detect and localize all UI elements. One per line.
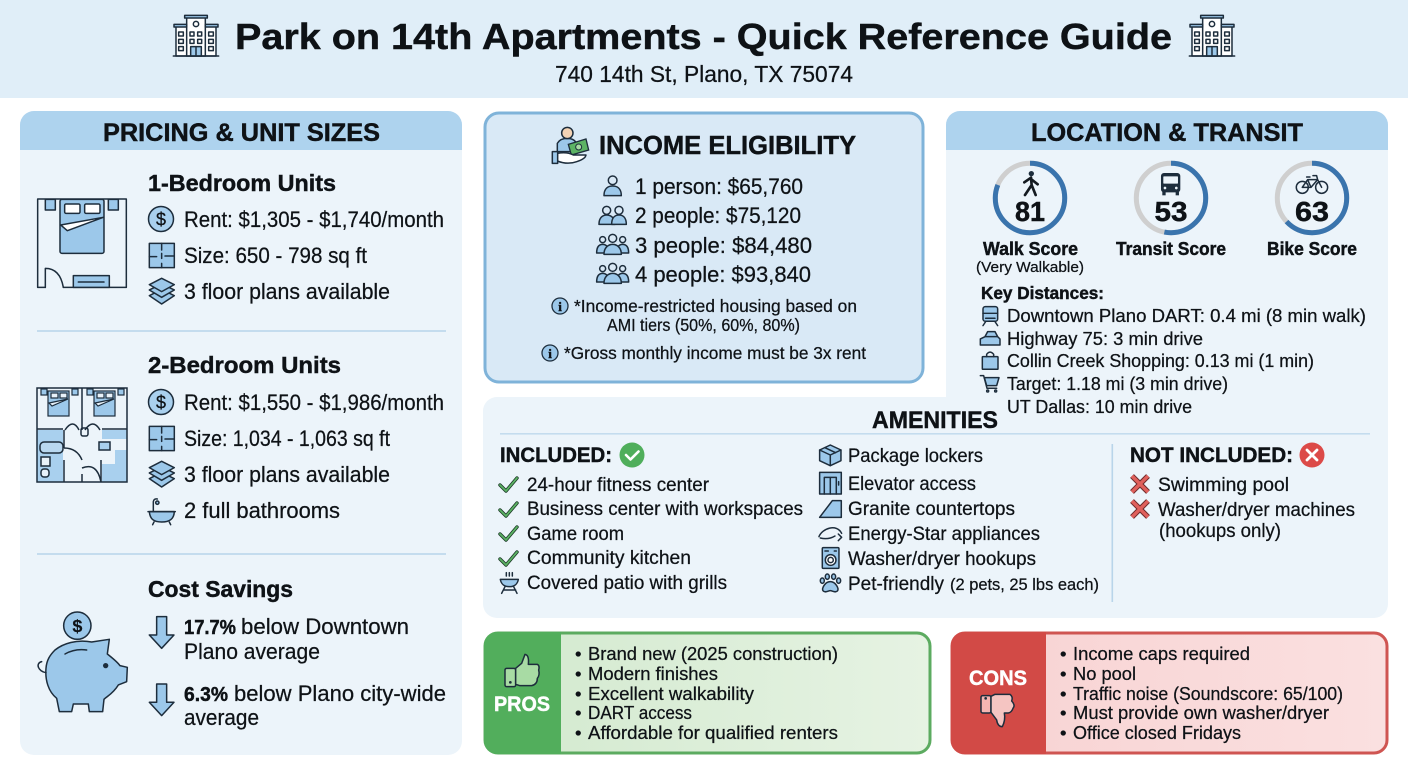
icon: two people bbox=[599, 206, 626, 224]
floor plans 1-bedroom: 3 floor plans available bbox=[184, 279, 390, 304]
income 2 people: 2 people: $75,120 bbox=[635, 203, 801, 228]
icon: dollar: $ bbox=[156, 210, 166, 230]
game room: Game room bbox=[527, 523, 624, 545]
note: income restricted: *Income-restricted housing based on bbox=[574, 296, 857, 316]
included heading: INCLUDED: bbox=[500, 444, 612, 467]
icon: floor plan bbox=[149, 426, 174, 451]
heading: location: LOCATION & TRANSIT bbox=[1031, 119, 1303, 147]
pros list bbox=[575, 643, 838, 743]
pros list: Excellent walkability bbox=[588, 683, 755, 704]
washer dryer machines: Washer/dryer machines bbox=[1158, 499, 1355, 521]
icon: dollar bbox=[148, 390, 174, 414]
business center: Business center with workspaces bbox=[527, 498, 803, 520]
icon: bathtub bbox=[148, 499, 175, 525]
not included list bbox=[1132, 474, 1355, 542]
icon: down arrow bbox=[149, 617, 174, 648]
icon: money in hand bbox=[552, 127, 589, 163]
icon: red x circle bbox=[1300, 442, 1324, 468]
granite countertops: Granite countertops bbox=[848, 498, 1015, 520]
icon: info: i bbox=[548, 346, 552, 361]
pros list: DART access bbox=[588, 702, 692, 723]
note: income restricted: AMI tiers (50%, 60%, 80%) bbox=[607, 315, 800, 335]
cons list bbox=[1060, 643, 1343, 743]
fitness center: 24-hour fitness center bbox=[527, 474, 709, 496]
icon: energy star bbox=[819, 528, 842, 541]
distance: UT Dallas: UT Dallas: 10 min drive bbox=[1007, 396, 1192, 417]
icon: two bedroom floor plan bbox=[37, 388, 127, 482]
icon: thumbs up bbox=[505, 654, 539, 687]
pet friendly: Pet-friendly bbox=[848, 573, 944, 595]
cost savings heading: Cost Savings bbox=[148, 576, 293, 602]
hookups only: (hookups only) bbox=[1159, 520, 1281, 542]
icon: piggy bank: $ bbox=[72, 616, 82, 636]
distance: Target: Target: 1.18 mi (3 min drive) bbox=[1007, 373, 1228, 394]
cons label: CONS bbox=[969, 667, 1027, 690]
heading: pricing: PRICING & UNIT SIZES bbox=[103, 119, 380, 147]
note: income restricted bbox=[574, 296, 857, 335]
bike score bbox=[1267, 163, 1357, 259]
pros list: Affordable for qualified renters bbox=[588, 722, 838, 743]
swimming pool: Swimming pool bbox=[1158, 474, 1289, 496]
icon: thumbs down bbox=[981, 694, 1014, 727]
header banner bbox=[0, 0, 1408, 98]
heading: amenities: AMENITIES bbox=[872, 407, 998, 434]
cons list: Office closed Fridays bbox=[1073, 722, 1241, 743]
bike score: 63 bbox=[1295, 196, 1329, 227]
panel: income eligibility bbox=[485, 113, 923, 382]
size 1-bedroom: Size: 650 - 798 sq ft bbox=[184, 243, 367, 268]
pros list: • bbox=[575, 722, 581, 743]
community kitchen: Community kitchen bbox=[527, 547, 691, 569]
icon: layers bbox=[149, 461, 174, 487]
icon: down arrow bbox=[149, 684, 174, 716]
pros list: • bbox=[575, 702, 581, 723]
cons list: Traffic noise (Soundscore: 65/100) bbox=[1073, 683, 1343, 704]
icon: bicycle bbox=[1296, 176, 1328, 193]
saving 17.7% bbox=[184, 614, 409, 664]
icon: package bbox=[820, 445, 841, 466]
panel: pros bbox=[484, 632, 930, 754]
income 4 people: 4 people: $93,840 bbox=[635, 262, 811, 287]
icon: building left bbox=[173, 15, 219, 56]
icon: pedestrian bbox=[1024, 171, 1038, 195]
icon: one person bbox=[604, 176, 621, 196]
panel: location and transit bbox=[946, 111, 1388, 425]
saving 6.3%: 6.3% bbox=[184, 684, 228, 706]
income 3 people: 3 people: $84,480 bbox=[635, 233, 812, 258]
heading: income eligibility: INCOME ELIGIBILITY bbox=[599, 130, 856, 160]
income 1 person: 1 person: $65,760 bbox=[635, 174, 803, 199]
cons list: • bbox=[1060, 722, 1066, 743]
icon: paw bbox=[820, 574, 841, 592]
saving 6.3%: below Plano city-wide bbox=[234, 681, 446, 706]
distance: highway: Highway 75: 3 min drive bbox=[1007, 328, 1203, 349]
pet friendly: (2 pets, 25 lbs each) bbox=[950, 575, 1099, 594]
icon: info bbox=[542, 345, 558, 361]
cons list: • bbox=[1060, 663, 1066, 684]
key distances heading: Key Distances: bbox=[981, 283, 1104, 303]
pros list: Brand new (2025 construction) bbox=[588, 643, 838, 664]
pros list: • bbox=[575, 643, 581, 664]
rent 1-bedroom: Rent: $1,305 - $1,740/month bbox=[184, 207, 444, 232]
icon: washer bbox=[822, 548, 839, 568]
saving 6.3% bbox=[184, 681, 446, 730]
saving 17.7%: Plano average bbox=[184, 639, 320, 664]
package lockers: Package lockers bbox=[848, 445, 983, 467]
walk score bbox=[976, 163, 1084, 276]
distance: DART: Downtown Plano DART: 0.4 mi (8 min walk) bbox=[1007, 305, 1366, 326]
pros list: • bbox=[575, 663, 581, 684]
transit score: 53 bbox=[1154, 196, 1188, 227]
walk score: (Very Walkable) bbox=[976, 259, 1084, 276]
red crosses bbox=[1132, 476, 1148, 517]
note: gross income: *Gross monthly income must be 3x rent bbox=[564, 343, 866, 363]
icon: dollar: $ bbox=[156, 392, 166, 412]
title: Park on 14th Apartments - Quick Reference Guide bbox=[235, 16, 1172, 57]
icon: elevator bbox=[820, 472, 841, 494]
icon: info: i bbox=[558, 299, 562, 314]
cons list: Must provide own washer/dryer bbox=[1073, 702, 1329, 723]
bathrooms: 2 full bathrooms bbox=[184, 498, 340, 523]
rent 2-bedroom: Rent: $1,550 - $1,986/month bbox=[184, 390, 444, 415]
bike score: Bike Score bbox=[1267, 239, 1357, 259]
icon: piggy bank bbox=[38, 612, 127, 712]
distance: Collin Creek: Collin Creek Shopping: 0.13 mi (1 min) bbox=[1007, 350, 1314, 371]
cons list: No pool bbox=[1073, 663, 1136, 684]
icon: cart bbox=[980, 376, 999, 392]
transit score bbox=[1116, 163, 1226, 259]
icon: info bbox=[552, 298, 568, 314]
icon: layers bbox=[149, 278, 174, 304]
cons list: Income caps required bbox=[1073, 643, 1250, 664]
icon: four people bbox=[597, 263, 629, 283]
icon: three people bbox=[597, 234, 629, 254]
pros list: Modern finishes bbox=[588, 663, 718, 684]
included list bbox=[500, 474, 803, 594]
pros label: PROS bbox=[494, 693, 550, 716]
transit score: Transit Score bbox=[1116, 239, 1226, 259]
saving 6.3%: average bbox=[184, 705, 259, 730]
icon: train bbox=[983, 307, 998, 326]
icon: granite bbox=[820, 501, 841, 517]
saving 17.7%: below Downtown bbox=[241, 614, 409, 639]
icon: car bbox=[980, 332, 1000, 345]
icon: one bedroom floor plan bbox=[38, 199, 126, 287]
location scores and distances bbox=[976, 163, 1366, 417]
washer dryer hookups: Washer/dryer hookups bbox=[848, 548, 1036, 570]
saving 17.7%: 17.7% bbox=[184, 617, 236, 639]
icon: green check circle bbox=[620, 442, 644, 468]
2-bedroom heading: 2-Bedroom Units bbox=[148, 352, 341, 378]
icon: building right bbox=[1189, 15, 1235, 56]
panel: amenities bbox=[483, 397, 1388, 618]
panel: pricing and unit sizes bbox=[20, 111, 462, 755]
size 2-bedroom: Size: 1,034 - 1,063 sq ft bbox=[184, 426, 390, 451]
cons list: • bbox=[1060, 702, 1066, 723]
icon: grill bbox=[500, 573, 518, 593]
icon: floor plan bbox=[149, 243, 174, 268]
covered patio: Covered patio with grills bbox=[527, 572, 727, 594]
pet friendly bbox=[848, 573, 1099, 595]
icon: dollar bbox=[148, 206, 174, 232]
walk score: 81 bbox=[1015, 196, 1045, 227]
icon: shopping bag bbox=[982, 352, 998, 369]
address subtitle: 740 14th St, Plano, TX 75074 bbox=[555, 61, 853, 87]
elevator access: Elevator access bbox=[848, 473, 976, 495]
panel: cons bbox=[951, 632, 1387, 754]
checks bbox=[500, 478, 517, 565]
floor plans 2-bedroom: 3 floor plans available bbox=[184, 462, 390, 487]
1-bedroom heading: 1-Bedroom Units bbox=[148, 170, 336, 196]
energy star appliances: Energy-Star appliances bbox=[848, 523, 1040, 545]
cons list: • bbox=[1060, 643, 1066, 664]
included list column 2 bbox=[819, 445, 1099, 595]
not included heading: NOT INCLUDED: bbox=[1130, 444, 1293, 467]
walk score: Walk Score bbox=[983, 239, 1078, 259]
pros list: • bbox=[575, 683, 581, 704]
icon: bus bbox=[1161, 173, 1180, 195]
cons list: • bbox=[1060, 683, 1066, 704]
